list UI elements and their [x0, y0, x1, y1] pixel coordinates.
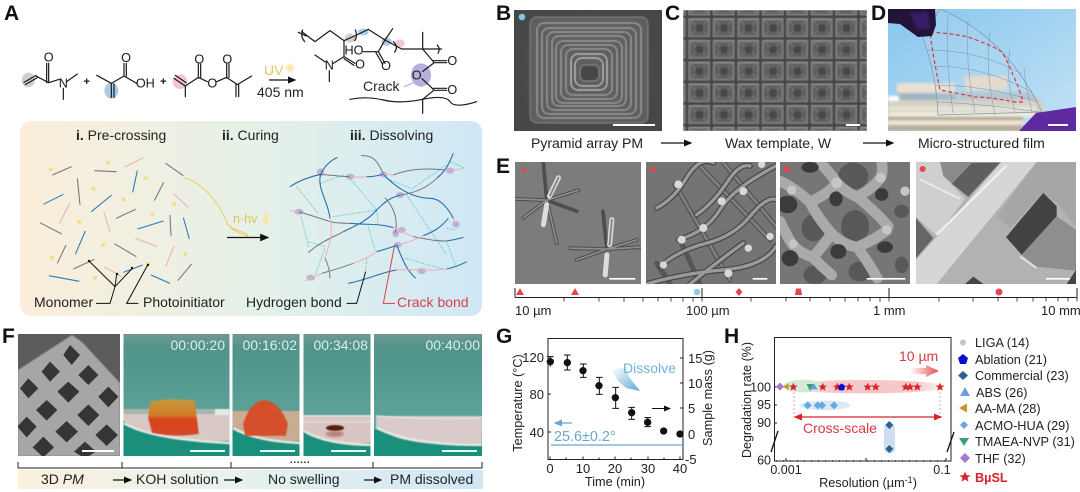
left axis labels: 80 — [530, 387, 544, 402]
atom labels: O — [207, 77, 217, 91]
10 µm annotation: 10 µm — [899, 348, 938, 364]
x axis labels — [546, 461, 687, 476]
legend: AA-MA: AA-MA (28) — [975, 402, 1041, 416]
photoinitiator dots — [49, 161, 187, 280]
timeline stages strip — [18, 470, 483, 489]
dissolve annotation: Dissolve — [623, 360, 676, 376]
panel label C: C — [665, 2, 680, 25]
atom labels: N — [59, 76, 68, 90]
panel label D: D — [871, 2, 886, 25]
crack label: Crack — [363, 78, 401, 94]
x ticks: 0.1 — [933, 463, 951, 477]
atom labels: O — [194, 53, 204, 67]
dissolution timeline bracket: ...... — [290, 455, 310, 466]
atom labels: O — [44, 50, 54, 64]
photo: 00:16:02 — [232, 334, 300, 456]
panel label F: F — [2, 325, 15, 348]
caption C: Wax template, W — [725, 135, 832, 151]
monomer label with leader — [34, 260, 133, 310]
x ticks — [770, 463, 951, 477]
y ticks: 90 — [757, 416, 771, 430]
data points — [547, 358, 684, 438]
legend: Ablation: Ablation (21) — [975, 353, 1047, 367]
UV reaction condition: UV — [264, 62, 284, 78]
UV reaction condition: 405 nm — [257, 84, 304, 100]
legend: ACMO-HUA: ACMO-HUA (29) — [975, 419, 1069, 433]
photo: micro-structured film — [888, 9, 1076, 131]
caption B: Pyramid array PM — [531, 135, 643, 151]
mass axis arrow — [652, 408, 670, 410]
SEM image E3: gyroid — [780, 162, 910, 284]
dissolution timeline bracket — [18, 455, 482, 468]
chart: degradation rate vs resolution — [740, 338, 954, 490]
shaded bands — [783, 380, 947, 453]
temperature annotation: 25.6±0.2° — [554, 429, 616, 445]
error bars — [547, 355, 651, 427]
legend: ABS: ABS (26) — [976, 386, 1027, 400]
photo: 00:16:02: 00:16:02 — [242, 337, 297, 353]
size scale axis — [515, 288, 1080, 318]
SEM image E4: macro lattice — [916, 162, 1076, 284]
scale labels: 100 µm — [686, 303, 730, 318]
panel label B: B — [496, 2, 511, 25]
panel label A: A — [4, 2, 19, 25]
x axis labels: 30 — [641, 461, 655, 476]
scale labels: 10 µm — [515, 303, 551, 318]
chart: temperature and sample mass over time — [511, 338, 715, 489]
atom labels: + — [160, 76, 167, 88]
right axis labels: 10 — [688, 376, 702, 391]
stage heading iii: iii. Dissolving — [350, 127, 433, 143]
left axis labels: 120 — [522, 350, 544, 365]
atom labels: O — [222, 53, 232, 67]
monomer label with leader: Monomer — [34, 294, 93, 310]
chemical reaction scheme — [22, 29, 477, 113]
light beam n·hv — [183, 178, 269, 237]
UV reaction condition — [257, 62, 304, 100]
y ticks: 100 — [750, 380, 771, 394]
y ticks: 95 — [757, 398, 771, 412]
panel: polymerization stages — [20, 121, 482, 316]
legend: TMAEA-NVP: TMAEA-NVP (31) — [975, 435, 1075, 449]
crack bond label with leader — [383, 247, 469, 310]
scale labels: 10 mm — [1041, 303, 1080, 318]
panel label G: G — [496, 325, 512, 348]
right axis labels: 15 — [688, 351, 702, 366]
legend: BµSL: BµSL — [975, 471, 1008, 485]
right axis labels: 0 — [688, 427, 695, 442]
atom labels: N — [325, 58, 334, 72]
legend: BµSL — [960, 471, 1008, 485]
timeline stages strip: No swelling — [268, 471, 340, 487]
SEM image: wax template — [683, 10, 867, 131]
arrow B to C — [661, 142, 691, 144]
monomer and polymer structures — [22, 29, 477, 113]
photo: 00:40:00: 00:40:00 — [426, 337, 480, 353]
temperature annotation — [551, 423, 683, 445]
y axis title: temperature: Temperature (°C) — [511, 354, 525, 452]
axis ticks and break marks — [771, 387, 954, 461]
caption D: Micro-structured film — [918, 135, 1045, 151]
scale markers — [516, 288, 1002, 296]
scattered monomers — [40, 158, 192, 283]
hydrogen bond label with leader: Hydrogen bond — [246, 294, 342, 310]
10 µm annotation — [899, 348, 939, 377]
photo: 00:00:20: 00:00:20 — [170, 337, 225, 353]
timeline stages strip: 3D PM — [41, 471, 84, 487]
x axis labels: 0 — [546, 461, 554, 476]
panel label E: E — [496, 155, 510, 178]
left axis labels: 40 — [530, 425, 544, 440]
data markers — [776, 383, 944, 453]
x axis labels: 20 — [608, 461, 622, 476]
y axis title: mass: Sample mass (g) — [701, 350, 715, 446]
photoinitiator label with leader: Photoinitiator — [143, 294, 225, 310]
atom labels: O — [381, 59, 391, 73]
y axis title: Degradation rate (%) — [740, 342, 754, 458]
x axis title: Resolution (µm — [819, 476, 905, 490]
left axis labels — [522, 350, 544, 440]
right axis labels: -5 — [685, 452, 697, 467]
stage heading ii: ii. Curing — [222, 127, 279, 143]
photoinitiator label with leader — [127, 264, 225, 310]
cross-scale span — [794, 388, 941, 436]
atom labels: + — [83, 76, 90, 88]
right axis labels: 5 — [688, 401, 695, 416]
x axis title: Time (min) — [585, 475, 645, 489]
atom labels: O — [121, 51, 131, 65]
legend — [958, 336, 1075, 485]
y ticks — [750, 380, 771, 468]
timeline stages strip: PM dissolved — [390, 471, 473, 487]
light beam n·hv: n·hv — [233, 212, 258, 226]
panel label H: H — [724, 325, 739, 348]
x axis labels: 10 — [576, 461, 590, 476]
dissolve annotation — [612, 360, 676, 391]
atom labels: O — [447, 54, 457, 68]
x axis title: -1 — [905, 475, 913, 485]
x axis title: ) — [913, 476, 917, 490]
photo: 00:34:08: 00:34:08 — [314, 337, 368, 353]
SEM image: pyramid — [514, 10, 662, 131]
arrow C to D — [863, 142, 893, 144]
SEM image E2: lattice — [646, 162, 776, 284]
SEM image: 3D PM lattice — [18, 334, 120, 456]
curing arrow — [227, 236, 268, 238]
cross-scale span: Cross-scale — [803, 420, 877, 436]
right axis labels — [685, 351, 702, 467]
SEM image E1: stars — [515, 162, 641, 284]
stage heading i: i. Pre-crossing — [76, 127, 166, 143]
crosslinked network — [290, 153, 467, 283]
photo: 00:40:00 — [374, 334, 482, 456]
y ticks: 60 — [757, 454, 771, 468]
scale labels: 1 mm — [873, 303, 906, 318]
photo: 00:34:08 — [304, 334, 370, 456]
x axis labels: 40 — [673, 461, 687, 476]
photo: 00:00:20 — [124, 334, 230, 456]
legend: THF: THF (32) — [975, 452, 1026, 466]
atom labels — [44, 43, 457, 97]
atom labels: OH — [136, 77, 155, 91]
legend: LIGA: LIGA (14) — [975, 336, 1029, 350]
atom labels: HO — [345, 43, 364, 57]
hydrogen bond label with leader — [246, 272, 366, 310]
crack bond label with leader: Crack bond — [397, 294, 469, 310]
timeline stages strip: KOH solution — [136, 471, 218, 487]
atom labels: O — [447, 83, 457, 97]
atom labels: O — [355, 57, 365, 71]
scale labels — [515, 303, 1080, 318]
legend: Commercial: Commercial (23) — [975, 369, 1069, 383]
x ticks: 0.001 — [770, 463, 802, 477]
atom labels: O — [412, 68, 422, 82]
